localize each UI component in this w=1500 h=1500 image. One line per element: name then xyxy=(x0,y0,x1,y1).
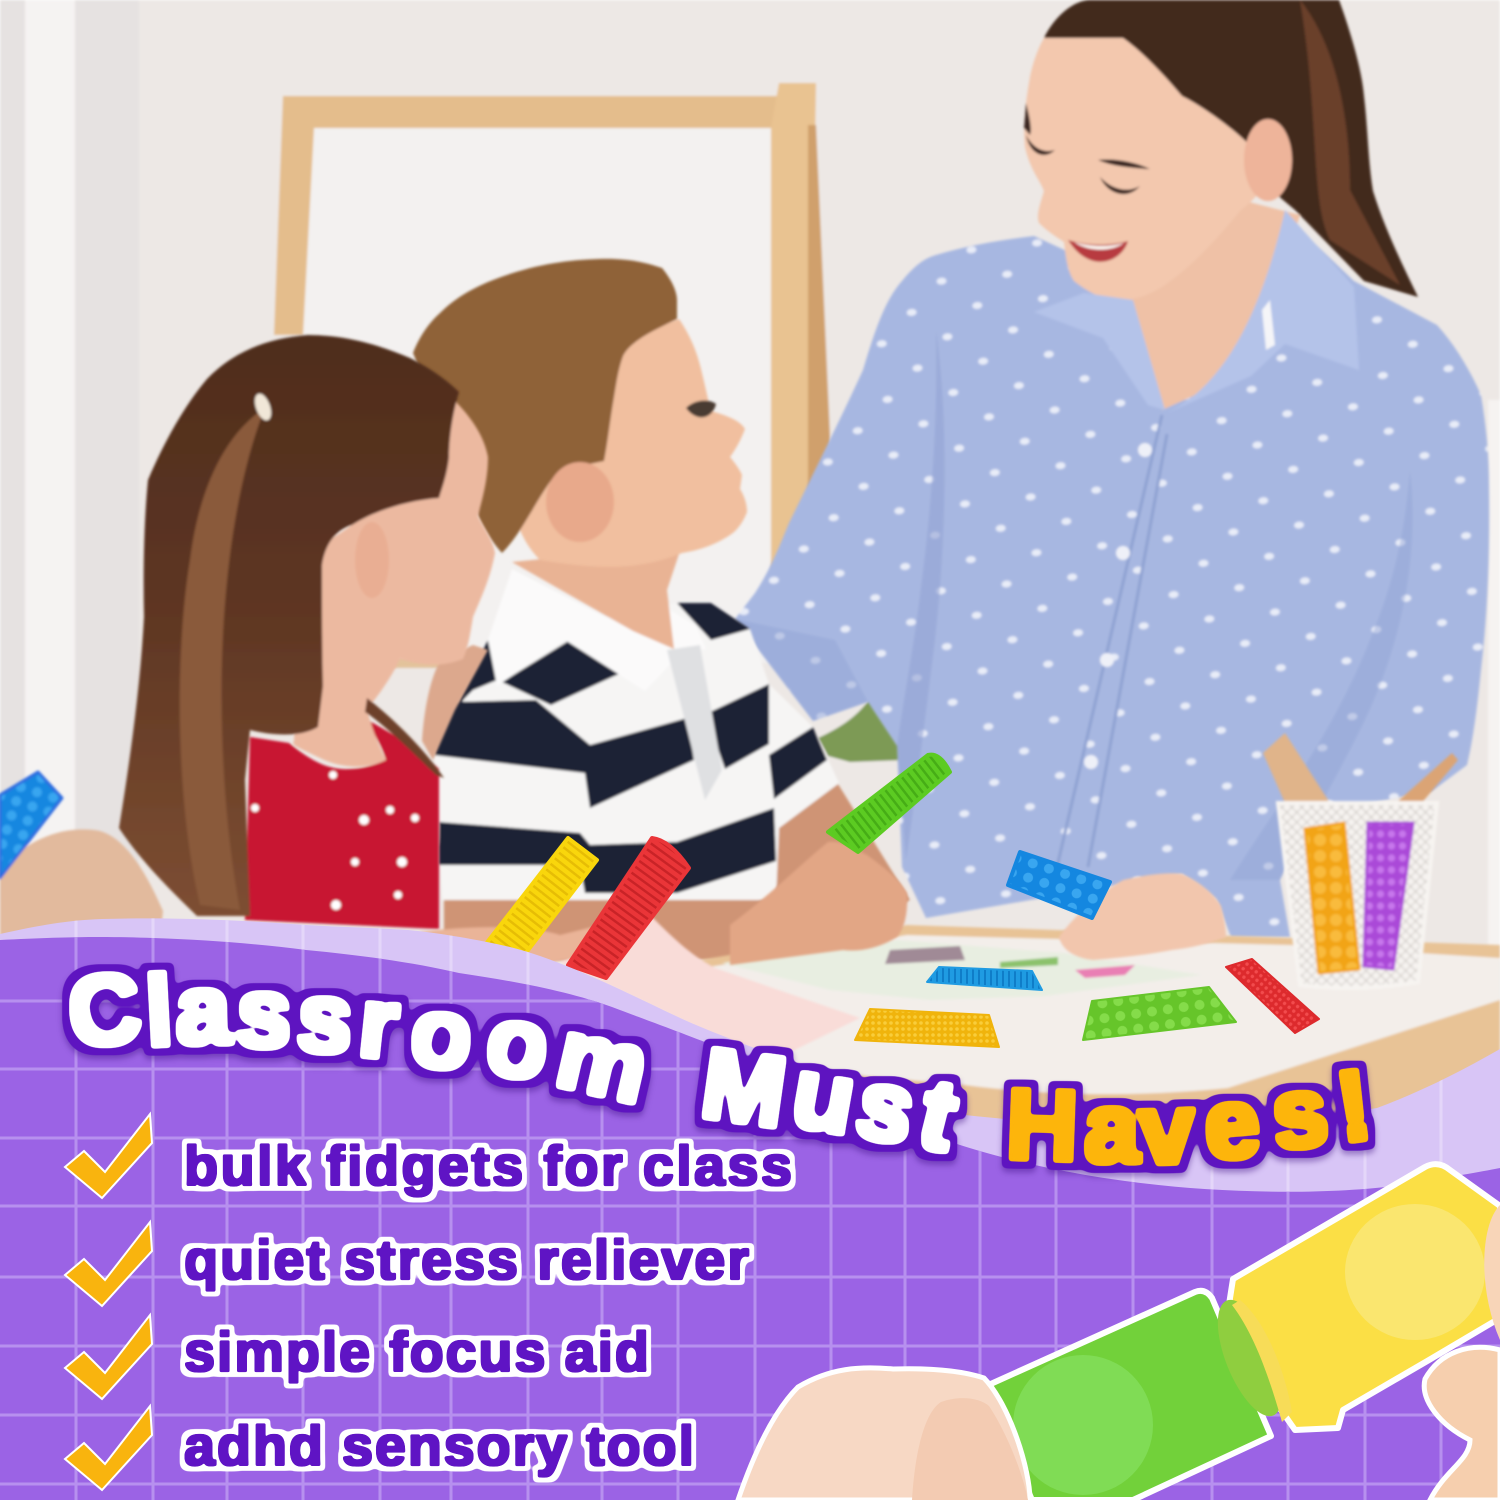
blue table fidget xyxy=(927,967,1042,990)
shirt hearts xyxy=(251,771,419,910)
woman teacher xyxy=(735,0,1489,937)
green block xyxy=(984,1291,1271,1500)
table top xyxy=(690,935,1500,1094)
shirt xyxy=(735,215,1489,937)
pink paper xyxy=(560,913,860,1062)
ear xyxy=(1244,119,1292,201)
red fidget xyxy=(568,838,689,978)
joint disc xyxy=(1205,1292,1295,1424)
green suction cup xyxy=(1013,1355,1153,1495)
Classroom: Classroom xyxy=(63,951,659,1125)
collar xyxy=(1034,293,1165,410)
right fingers xyxy=(1424,1347,1500,1500)
woman's hand on table xyxy=(1059,873,1226,960)
boy xyxy=(413,259,910,960)
girl ear xyxy=(355,522,389,598)
item 3 text: simple focus aid xyxy=(184,1320,649,1383)
item 4 text: adhd sensory tool xyxy=(184,1414,694,1477)
teacher's hand on boy's shoulder xyxy=(422,645,488,760)
red shirt xyxy=(245,718,439,929)
easel with whiteboard xyxy=(274,83,836,668)
held and table fidgets xyxy=(485,755,1319,1047)
item 4 check icon xyxy=(65,1406,152,1490)
girl head skin xyxy=(293,395,495,767)
mesh cup xyxy=(1278,803,1437,988)
pencils xyxy=(1263,733,1330,803)
placket xyxy=(667,645,722,800)
plant xyxy=(818,640,905,762)
pencil cup with fidgets xyxy=(1263,733,1458,988)
checklist text xyxy=(184,1134,792,1477)
green fidget held by boy xyxy=(828,755,950,852)
photo background: classroom wall xyxy=(0,0,1500,1200)
boy ear xyxy=(546,462,614,542)
item 1 text: bulk fidgets for class xyxy=(184,1134,792,1197)
polo collar xyxy=(488,569,706,691)
yellow block xyxy=(1225,1164,1500,1430)
purple panel with grid xyxy=(0,920,1500,1500)
face xyxy=(1024,38,1260,300)
orange pad xyxy=(1305,823,1359,973)
neck xyxy=(1113,200,1300,410)
item 3 check icon xyxy=(65,1315,152,1399)
boy's upper arm xyxy=(444,784,910,960)
title: Classroom Must Haves! xyxy=(63,951,1378,1186)
table edge xyxy=(700,925,1500,1135)
right fingertip xyxy=(1484,1205,1500,1340)
big fidget with hands xyxy=(738,1164,1500,1500)
girl xyxy=(119,335,495,929)
left hand xyxy=(738,1368,1030,1500)
boy eye xyxy=(686,401,716,417)
open book page xyxy=(722,940,1201,1000)
yellow fidget xyxy=(485,838,597,958)
item 2 check icon xyxy=(65,1222,152,1306)
boy hair xyxy=(413,259,677,553)
girl's hands xyxy=(420,925,610,965)
checklist xyxy=(65,1114,792,1490)
hair tie xyxy=(252,391,274,423)
polo shirt xyxy=(434,603,839,900)
navy stripes xyxy=(434,603,827,893)
ponytail highlight xyxy=(180,408,265,910)
yellow suction cup xyxy=(1345,1204,1485,1340)
item 1 check icon xyxy=(65,1114,152,1198)
item 2 text: quiet stress reliever xyxy=(184,1228,749,1291)
Haves!: Haves! xyxy=(1004,1048,1378,1186)
brows and eyes xyxy=(1024,103,1150,194)
boy's hand xyxy=(730,842,907,965)
ponytail and hair xyxy=(1044,0,1418,297)
green table fidget xyxy=(1083,987,1236,1040)
purple pad xyxy=(1364,823,1413,969)
shirt shadows xyxy=(897,330,945,860)
loose strand xyxy=(365,698,444,778)
boy head xyxy=(512,319,747,567)
thumb xyxy=(912,1398,1028,1500)
placket and buttons xyxy=(1057,415,1167,867)
table xyxy=(560,913,1500,1135)
lavender wave band xyxy=(0,918,1500,1192)
smile xyxy=(1068,240,1128,262)
girl hair cap and ponytail xyxy=(119,335,459,916)
blue fidget xyxy=(1008,852,1110,918)
red table fidget xyxy=(1226,959,1319,1033)
yellow table fidget xyxy=(855,1009,999,1047)
left hand with blue fidget xyxy=(0,772,163,940)
Must: Must xyxy=(695,1027,968,1173)
boy neck xyxy=(512,545,682,649)
